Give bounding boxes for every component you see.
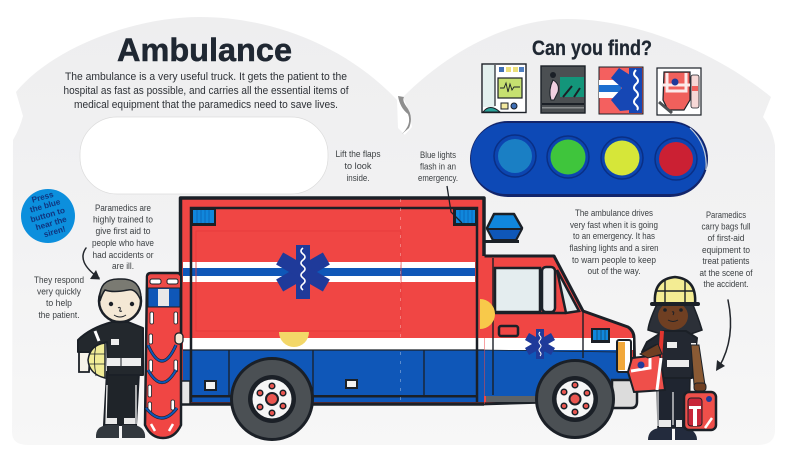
paramedic shirt xyxy=(642,331,697,378)
paramedic legs xyxy=(104,372,139,425)
paramedic hair xyxy=(648,298,702,335)
callout: blue lights: Blue lights xyxy=(420,150,456,161)
paramedic boots xyxy=(648,428,697,440)
button: red xyxy=(655,138,697,180)
callout: they respond: very quickly xyxy=(37,286,81,298)
paramedic forearm xyxy=(640,344,662,358)
side markers xyxy=(205,381,216,390)
shoulder bag strap xyxy=(660,331,662,360)
ambulance xyxy=(179,198,637,440)
callout badge: press the blue button: Press xyxy=(31,190,55,205)
cab blue light xyxy=(591,328,610,343)
blue light: rear xyxy=(190,208,216,226)
rear step xyxy=(179,381,190,404)
callout: paramedics carry bags: the accident. xyxy=(704,279,748,290)
callout: they respond xyxy=(34,275,84,321)
callout: lift the flaps: to look xyxy=(344,161,372,172)
rear wheel xyxy=(232,358,312,440)
paramedic face xyxy=(658,302,688,330)
callout: paramedics carry bags xyxy=(700,210,753,290)
callout: lift the flaps: Lift the flaps xyxy=(336,149,381,160)
callout: paramedics carry bags: carry bags full xyxy=(702,222,750,232)
paramedic forearm xyxy=(79,348,90,372)
flap tab: bottom xyxy=(279,332,309,347)
stretcher xyxy=(145,273,181,438)
centre fold shading xyxy=(398,96,411,134)
panel: left page xyxy=(12,17,412,445)
icon: heart monitor xyxy=(482,64,526,112)
ambulance box body xyxy=(179,198,495,404)
callout: they respond: They respond xyxy=(34,275,84,286)
icon: stretcher interior xyxy=(541,66,585,113)
title: Ambulance xyxy=(117,32,292,68)
callout badge: press the blue button: hear the xyxy=(35,215,68,232)
beacon light xyxy=(485,214,522,243)
callout: blue lights: flash in an xyxy=(420,162,456,172)
character: male paramedic with stretcher xyxy=(78,273,183,438)
cab star of life xyxy=(525,329,555,359)
callout: ambulance drives: to an emergency. It has xyxy=(573,231,655,242)
character: female paramedic with bags xyxy=(628,277,716,440)
arrow: to blue light xyxy=(447,186,462,223)
cab window xyxy=(495,268,540,312)
callout: paramedics trained xyxy=(92,203,154,272)
arrow: to paramedic xyxy=(83,248,100,280)
callout: paramedics carry bags: of first-aid xyxy=(708,233,744,244)
heading: can you find: Can you find? xyxy=(532,37,652,60)
callout: they respond: the patient. xyxy=(38,310,80,321)
intro paragraph: medical equipment that the paramedics need to save lives. xyxy=(74,99,338,111)
paramedic shirt xyxy=(78,322,143,375)
paramedic head xyxy=(99,280,141,322)
callout badge: press the blue button: the blue xyxy=(29,197,62,215)
callout: lift the flaps xyxy=(336,149,381,184)
panel: right page xyxy=(400,19,775,445)
button panel xyxy=(470,121,708,197)
ambulance cab xyxy=(480,256,637,408)
blue light: front xyxy=(453,208,477,226)
callout: paramedics trained: highly trained to xyxy=(93,214,153,226)
callout: lift the flaps: inside. xyxy=(346,173,370,184)
button: blue xyxy=(494,135,536,177)
callout: ambulance drives: The ambulance drives xyxy=(575,208,653,219)
intro paragraph: The ambulance is a very useful truck. It gets the patient to the xyxy=(65,71,347,83)
yellow helmet xyxy=(88,343,105,378)
door handle xyxy=(499,326,518,336)
callout: paramedics trained: had accidents or xyxy=(92,250,154,261)
callout: ambulance drives: to warn people to keep xyxy=(572,255,656,266)
wing mirror xyxy=(542,267,555,312)
paramedic hand xyxy=(175,333,183,344)
callout: paramedics trained: are ill. xyxy=(112,261,134,272)
intro paragraph: hospital as fast as possible, and carries all the essential items of xyxy=(64,85,349,97)
callout: paramedics carry bags: at the scene of xyxy=(700,268,753,279)
outer frame xyxy=(180,198,484,404)
book fold line xyxy=(400,199,402,403)
die-cut window xyxy=(80,117,328,194)
shoulder bag xyxy=(628,355,665,392)
paramedic trousers xyxy=(657,378,690,428)
callout: ambulance drives: very fast when it is going xyxy=(570,220,658,231)
front bumper xyxy=(612,380,637,408)
callout: blue lights xyxy=(418,150,458,184)
callout: paramedics trained: people who have xyxy=(92,238,154,249)
medical bag xyxy=(684,392,716,430)
flap outline xyxy=(196,231,401,331)
arrow: to medical bags xyxy=(716,300,731,371)
callout: ambulance drives: flashing lights and a siren xyxy=(570,243,658,254)
yellow helmet xyxy=(650,277,700,306)
star of life xyxy=(276,245,330,299)
callout: they respond: to help xyxy=(46,298,72,309)
callout badge: press the blue button xyxy=(21,188,75,243)
intro paragraph xyxy=(64,71,349,111)
front wheel xyxy=(536,360,614,438)
callout badge: press the blue button: siren! xyxy=(43,224,67,239)
icon: first aid backpack xyxy=(657,68,701,115)
paramedic boots xyxy=(96,425,145,438)
paramedic hand xyxy=(694,383,706,391)
callout: ambulance drives: out of the way. xyxy=(588,266,640,277)
inner frame xyxy=(191,208,477,402)
windshield xyxy=(557,270,579,313)
callout: paramedics trained: Paramedics are xyxy=(95,203,151,214)
button: yellow xyxy=(601,137,643,179)
callout: paramedics carry bags: equipment to xyxy=(702,245,750,256)
callout: paramedics trained: give first aid to xyxy=(96,226,150,237)
flap tab: side xyxy=(480,299,495,329)
headlight xyxy=(617,340,631,372)
callout: paramedics carry bags: Paramedics xyxy=(706,210,746,221)
callout: ambulance drives xyxy=(570,208,658,277)
callout: paramedics carry bags: treat patients xyxy=(702,256,750,267)
callout: blue lights: emergency. xyxy=(418,173,458,184)
icon: star of life xyxy=(599,67,643,114)
callout badge: press the blue button: button to xyxy=(29,206,66,224)
button: green xyxy=(547,136,589,178)
paramedic arm xyxy=(691,345,705,385)
